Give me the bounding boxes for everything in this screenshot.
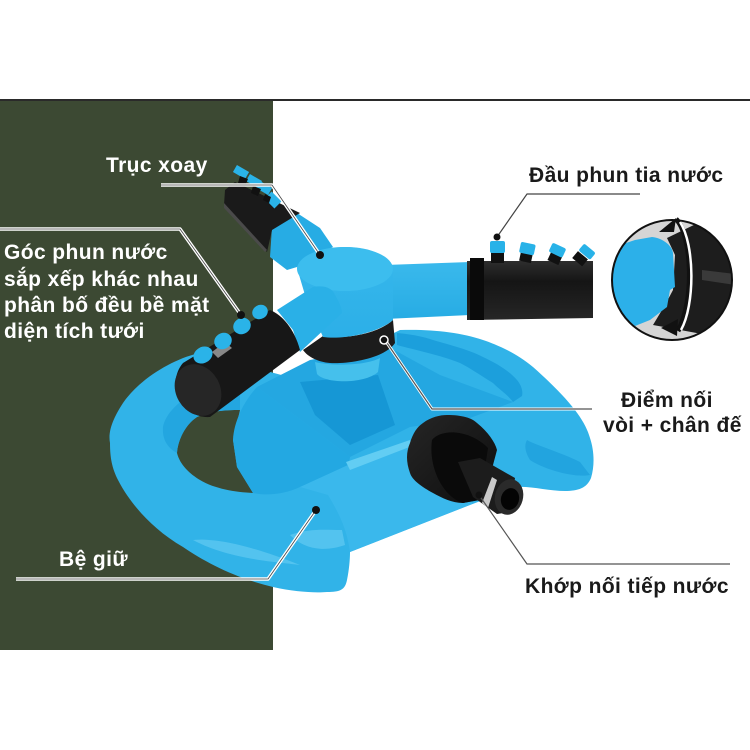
base body plateau	[257, 345, 513, 457]
label: Điểm nối vòi + chân đế: vòi + chân đế	[603, 414, 742, 437]
leader: goc phun	[0, 229, 245, 319]
background panel	[0, 99, 750, 650]
label: Góc phun nước: sắp xếp khác nhau	[4, 267, 199, 291]
label: Bệ giữ: Bệ giữ	[59, 548, 128, 571]
label: Góc phun nước	[4, 241, 210, 343]
label: Góc phun nước: diện tích tưới	[4, 320, 145, 343]
inset: rotation detail	[605, 218, 735, 340]
leader: diem noi	[380, 336, 592, 409]
hub	[297, 247, 393, 338]
label: Trục xoay: Trục xoay	[106, 154, 208, 177]
label: Điểm nối vòi + chân đế: Điểm nối	[621, 389, 713, 412]
right lobe shade	[525, 440, 590, 476]
front arm	[165, 286, 342, 424]
right recess	[397, 333, 522, 402]
label: Điểm nối vòi + chân đế	[603, 389, 742, 437]
neck	[315, 358, 380, 381]
ring lower highlights	[193, 540, 300, 565]
leader: truc xoay	[161, 185, 324, 259]
hose connector	[407, 415, 527, 518]
label: Góc phun nước: Góc phun nước	[4, 241, 168, 264]
sprinkler product	[110, 165, 596, 592]
base left wall	[233, 387, 350, 494]
base right wall	[300, 443, 472, 552]
label: Góc phun nước: phân bố đều bề mặt	[4, 294, 210, 317]
leader: khop noi	[476, 492, 730, 564]
rotation arrow	[659, 218, 691, 336]
right arm	[385, 241, 596, 320]
leader: be giu	[16, 506, 320, 579]
leader: dau phun	[494, 194, 640, 240]
collar	[303, 320, 395, 363]
base ring	[110, 330, 594, 592]
label: Đầu phun tia nước: Đầu phun tia nước	[529, 164, 723, 187]
ring inner rim	[163, 390, 240, 453]
back arm	[224, 165, 333, 270]
label: Khớp nối tiếp nước: Khớp nối tiếp nước	[525, 575, 729, 598]
front arm nozzles	[190, 302, 270, 367]
leader lines	[0, 185, 730, 579]
